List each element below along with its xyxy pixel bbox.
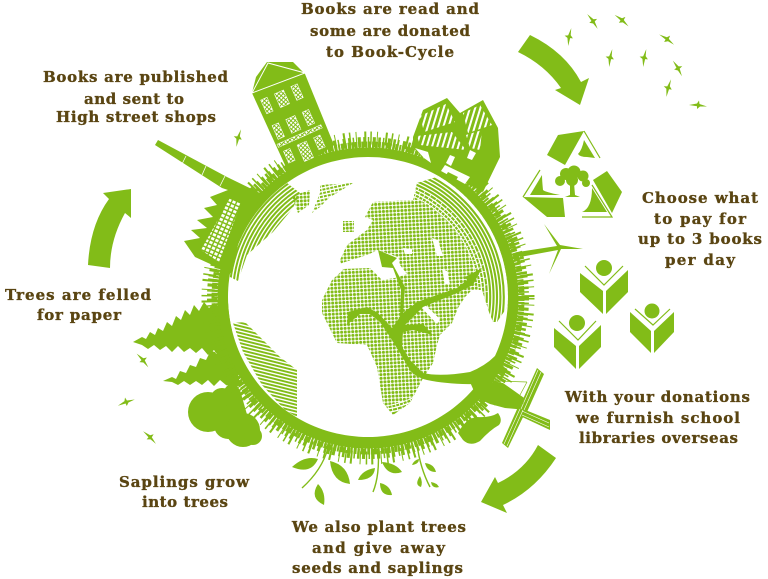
text: saplings grow: into trees bbox=[142, 493, 228, 511]
sapling 3 bbox=[412, 444, 439, 487]
windmill thin rear sail bbox=[495, 381, 527, 404]
fir tree upper bbox=[133, 302, 232, 365]
text: trees are felled: for paper bbox=[37, 306, 122, 324]
continent: Iceland dots bbox=[343, 221, 354, 232]
river roots with arrows bbox=[347, 250, 505, 384]
globe disk bbox=[228, 157, 508, 437]
globe map bbox=[230, 176, 508, 416]
text: plant trees: We also plant trees bbox=[291, 518, 466, 536]
text: trees are felled bbox=[5, 286, 152, 324]
birds bbox=[116, 11, 707, 446]
text: saplings grow bbox=[119, 473, 250, 511]
windmill bbox=[470, 368, 550, 448]
windows bbox=[258, 82, 332, 169]
windmill base bbox=[470, 382, 527, 410]
reader book 1 bbox=[580, 260, 628, 314]
tudor timber frames bbox=[417, 104, 492, 150]
text: choose what to pay bbox=[638, 189, 762, 269]
continent: South America bbox=[233, 322, 297, 417]
windmill sail hatching bbox=[504, 370, 549, 446]
wind turbine bbox=[518, 224, 583, 274]
recycling books icon bbox=[523, 131, 622, 217]
text: choose what to pay: per day bbox=[665, 251, 736, 269]
text: with your donations: With your donations bbox=[564, 388, 750, 406]
continent: Greenland bbox=[312, 183, 353, 213]
text: choose what to pay: to pay for bbox=[654, 210, 747, 228]
text: books are published: Books are published bbox=[43, 68, 228, 86]
continent: Eurasia and Africa dots bbox=[322, 176, 508, 415]
left book bbox=[523, 170, 565, 217]
text: books are published bbox=[43, 68, 228, 126]
georgian building bbox=[252, 62, 334, 176]
top book bbox=[547, 131, 600, 165]
text: with your donations: libraries overseas bbox=[579, 429, 738, 447]
globe ring and grass bbox=[208, 138, 528, 458]
text: trees are felled: Trees are felled bbox=[5, 286, 152, 304]
windmill sails bbox=[502, 368, 550, 448]
factory chimney and saw-tooth roof bbox=[155, 140, 262, 274]
arrow: bottom right bbox=[481, 445, 556, 513]
factory windows bbox=[201, 198, 241, 262]
roof outline bbox=[252, 63, 305, 93]
text: books are published: High street shops bbox=[56, 108, 216, 126]
text: with your donations bbox=[564, 388, 750, 447]
text: books are read bbox=[301, 0, 480, 61]
text: saplings grow: Saplings grow bbox=[119, 473, 250, 491]
fir tree lower bbox=[163, 348, 240, 386]
text: plant trees bbox=[291, 518, 466, 577]
tree in centre bbox=[555, 166, 590, 197]
chimney joints bbox=[182, 156, 225, 186]
sapling 2 bbox=[358, 448, 402, 495]
factory bbox=[155, 140, 262, 274]
text: books are published: and sent to bbox=[84, 90, 184, 108]
text: books are read: some are donated bbox=[310, 22, 470, 40]
arrow: top right bbox=[518, 35, 589, 105]
text: with your donations: we furnish school bbox=[575, 409, 740, 427]
arrow: left bbox=[88, 189, 131, 268]
text: plant trees: and give away bbox=[312, 539, 446, 557]
text: choose what to pay: Choose what bbox=[642, 189, 758, 207]
text: plant trees: seeds and saplings bbox=[292, 559, 463, 577]
continent: North America stripes bbox=[230, 183, 300, 281]
reader book 2 bbox=[554, 315, 601, 369]
text: choose what to pay: up to 3 books bbox=[638, 230, 762, 248]
text: books are read: Books are read and bbox=[301, 0, 480, 18]
bush bbox=[188, 380, 262, 447]
right book bbox=[582, 171, 622, 217]
tudor building bbox=[413, 98, 500, 192]
bean mound bbox=[458, 413, 501, 444]
continent: Central America dots bbox=[292, 190, 310, 213]
tudor lower windows bbox=[415, 148, 476, 184]
text: books are read: to Book-Cycle bbox=[326, 43, 454, 61]
sapling 1 bbox=[292, 448, 350, 505]
reader book 3 bbox=[630, 304, 674, 353]
